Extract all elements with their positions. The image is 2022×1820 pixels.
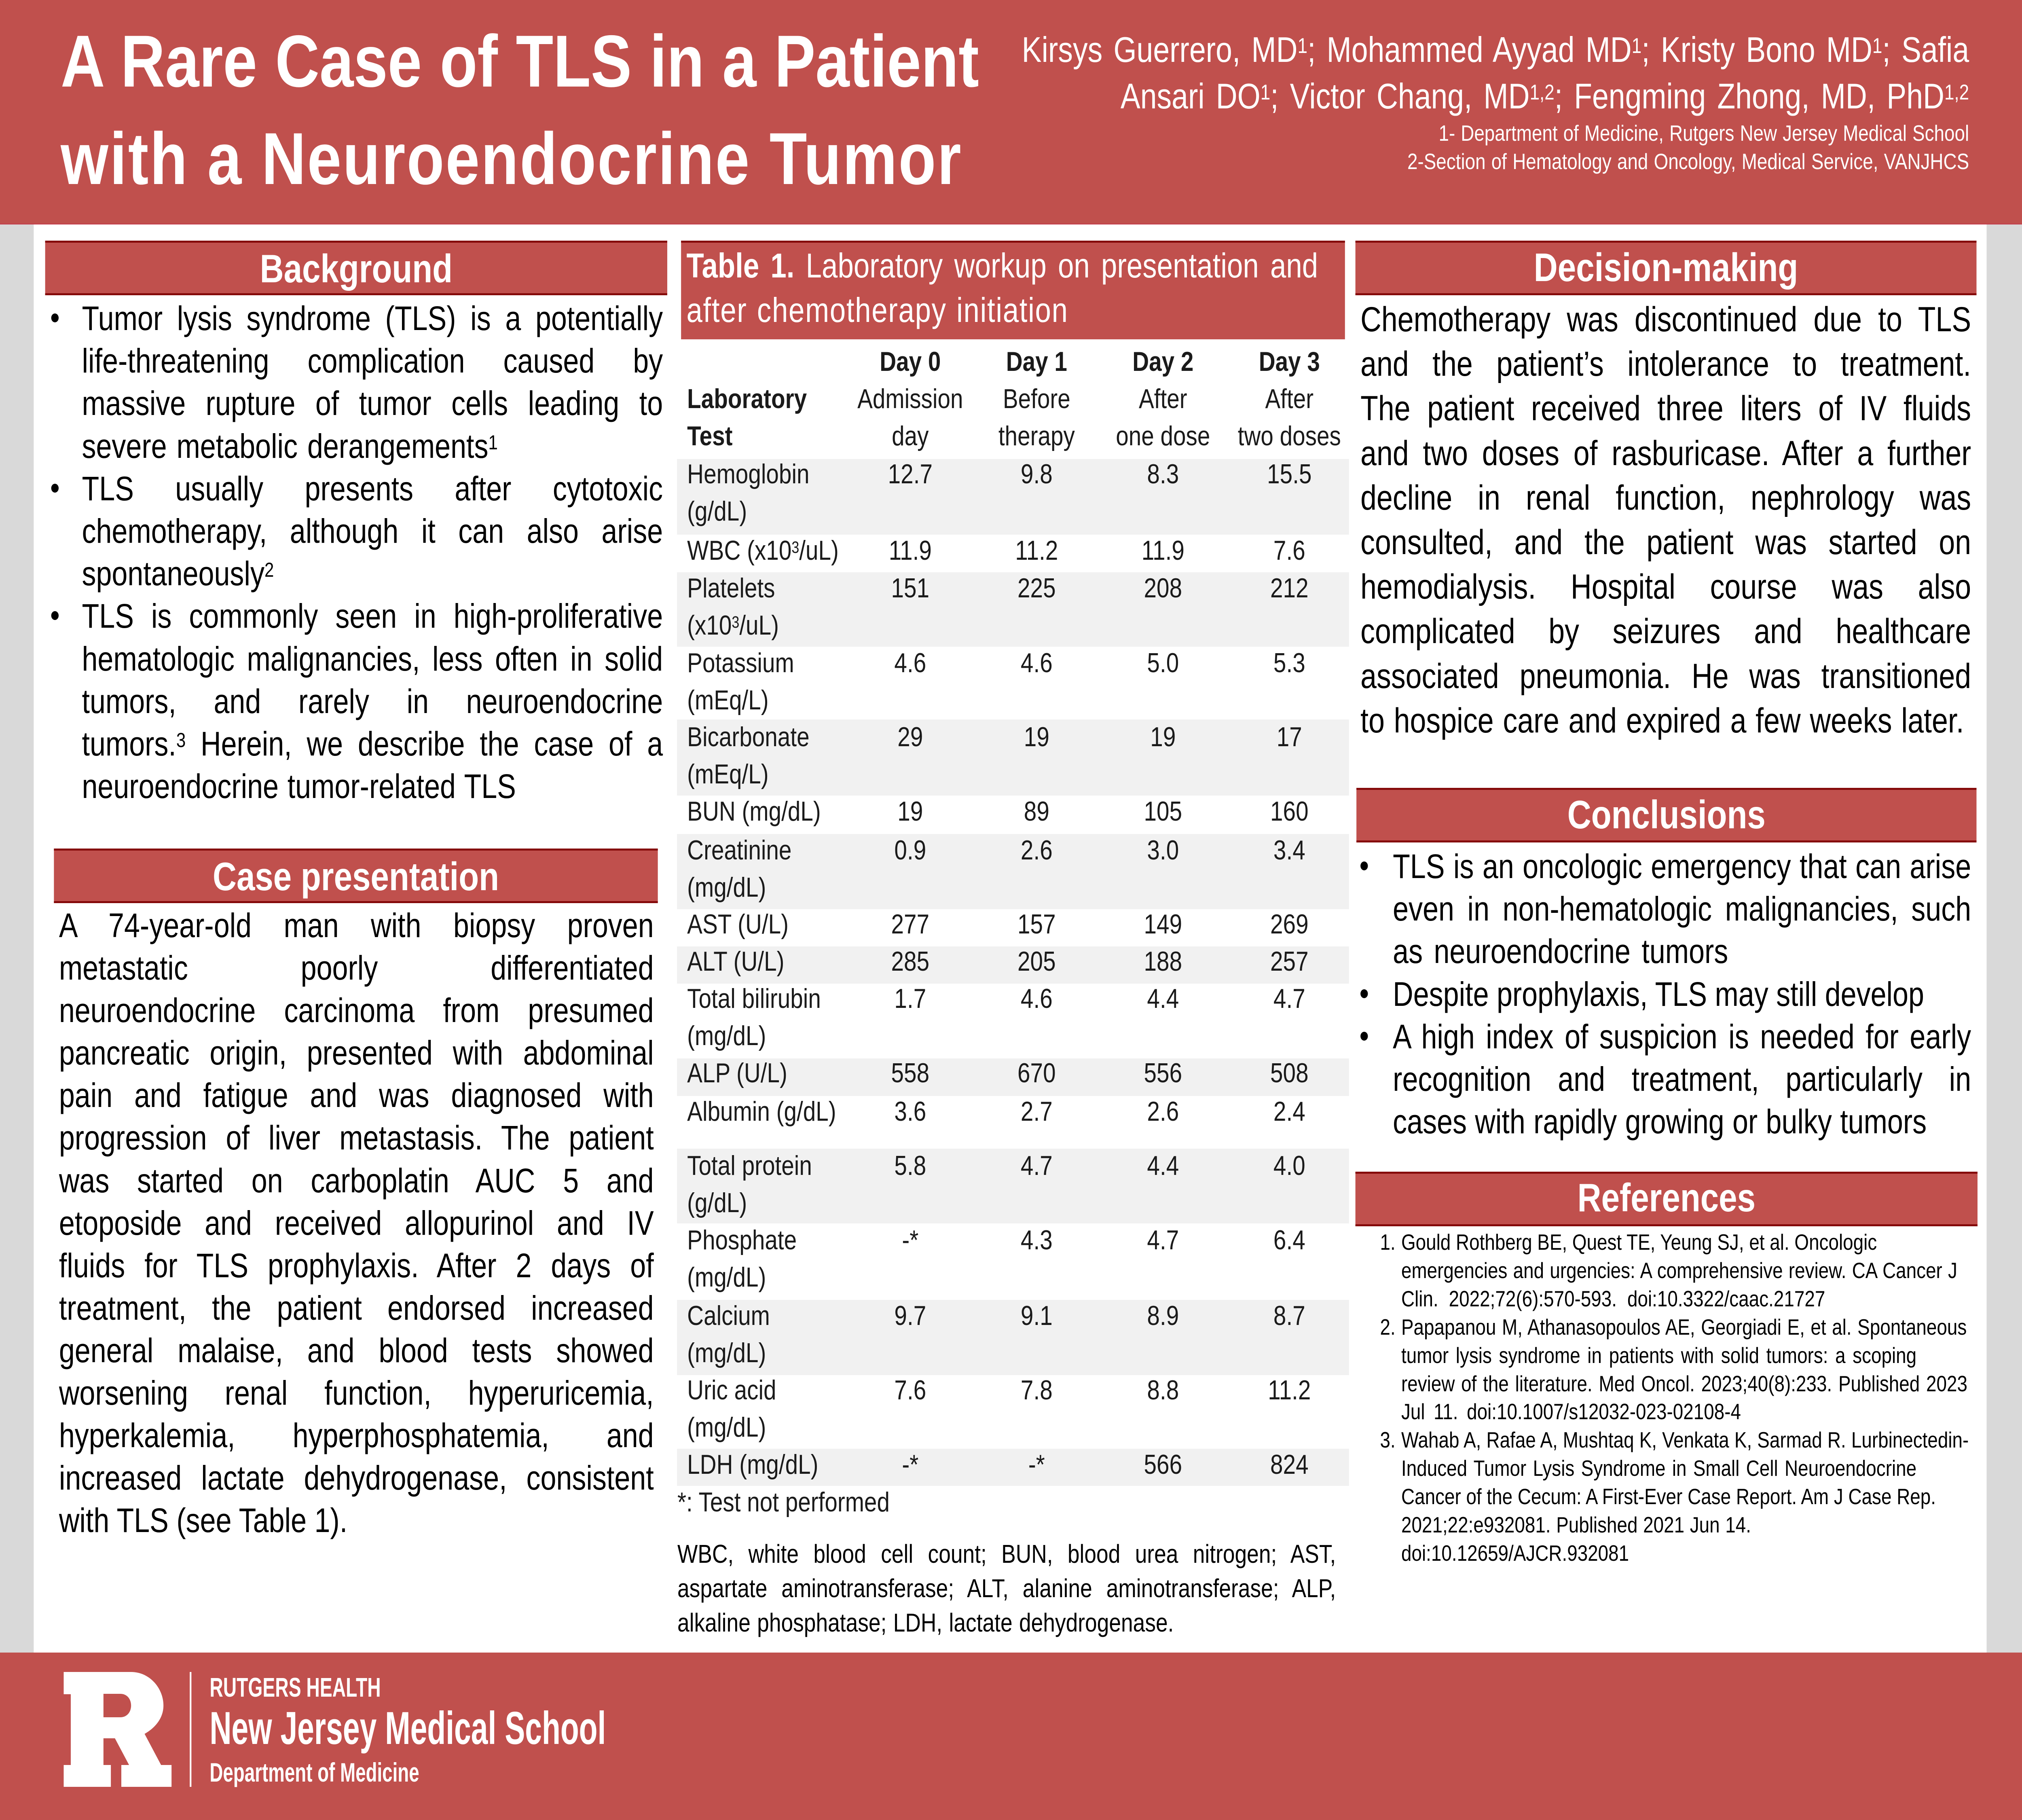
row: WBC: 11.9: [1142, 535, 1184, 566]
reference 2: tumor lysis syndrome in patients with solid tumors: a scoping: [1401, 1343, 1916, 1368]
row: potassium: 4.6: [894, 648, 926, 678]
row: phosphate: 4.7: [1147, 1225, 1179, 1255]
title: [61, 13, 979, 207]
table header row: therapy: [998, 421, 1075, 451]
row: ALP: 558: [891, 1058, 929, 1088]
row: uric acid: 7.6: [894, 1375, 926, 1405]
heading: Background: [45, 241, 667, 295]
row: BUN: 160: [1270, 796, 1309, 827]
row: potassium: [677, 647, 1349, 720]
panel: case presentation text: increased lactate dehydrogenase, consistent: [59, 1459, 654, 1497]
row: bicarbonate: Bicarbonate: [687, 722, 810, 752]
panel: decision-making text: to hospice care and expired a few weeks later.: [1360, 701, 1964, 740]
heading: Conclusions: Conclusions: [1567, 792, 1766, 837]
table abbreviations note: aspartate aminotransferase; ALT, alanine aminotransferase; ALP,: [677, 1574, 1336, 1603]
panel: case presentation text: worsening renal function, hyperuricemia,: [59, 1374, 654, 1412]
table footnote: test not performed: *: Test not performed: [677, 1487, 890, 1517]
table header row: Day 0: [880, 346, 941, 377]
bullet: TLS definition: massive rupture of tumor cells leading to: [82, 384, 663, 422]
row: uric acid: (mg/dL): [687, 1412, 766, 1443]
row: ALT: 257: [1270, 946, 1309, 977]
bullet: TLS after chemotherapy: chemotherapy, although it can also arise: [82, 512, 663, 550]
row: uric acid: 11.2: [1268, 1375, 1311, 1405]
row: bicarbonate: (mEq/L): [687, 759, 769, 789]
row: uric acid: [677, 1375, 1349, 1449]
row: total bilirubin: 1.7: [894, 983, 926, 1014]
row: ALP: 556: [1144, 1058, 1182, 1088]
reference 2: review of the literature. Med Oncol. 2023;40(8):233. Published 2023: [1401, 1371, 1967, 1396]
row: LDH: 824: [1270, 1449, 1309, 1480]
left side bar: [0, 224, 34, 1653]
row: total protein: (g/dL): [687, 1187, 747, 1218]
reference 3: Induced Tumor Lysis Syndrome in Small Cell Neuroendocrine: [1401, 1456, 1916, 1481]
row: creatinine: 2.6: [1021, 835, 1053, 866]
row: platelets: (x103/uL): [687, 610, 779, 641]
heading: References: [1356, 1172, 1978, 1226]
row: BUN: 105: [1144, 796, 1182, 827]
bullet: TLS in malignancies: hematologic malignancies, less often in solid: [82, 640, 663, 678]
row: WBC: 11.2: [1015, 535, 1058, 566]
row: bicarbonate: 29: [897, 722, 923, 752]
panel: case presentation text: with TLS (see Table 1).: [59, 1501, 347, 1539]
row: WBC: WBC (x103/uL): [687, 535, 839, 566]
panel: case presentation text: was started on carboplatin AUC 5 and: [59, 1162, 654, 1200]
reference 1: Gould Rothberg BE, Quest TE, Yeung SJ, et al. Oncologic: [1401, 1230, 1877, 1255]
bullet: index of suspicion: A high index of suspicion is needed for early: [1393, 1018, 1971, 1056]
row: total protein: 4.0: [1273, 1150, 1305, 1181]
panel: case presentation text: pain and fatigue and was diagnosed with: [59, 1076, 654, 1114]
row: LDH: LDH (mg/dL): [687, 1449, 819, 1480]
panel: case presentation text: etoposide and received allopurinol and IV: [59, 1204, 654, 1242]
reference 2: Jul 11. doi:10.1007/s12032-023-02108-4: [1401, 1399, 1741, 1424]
text: 2.: [1380, 1314, 1396, 1340]
table abbreviations note: WBC, white blood cell count; BUN, blood urea nitrogen; AST,: [677, 1539, 1336, 1568]
panel: background text: [82, 297, 663, 808]
row: LDH: -*: [1028, 1449, 1045, 1480]
row: ALP: 508: [1270, 1058, 1309, 1088]
panel: decision-making text: and two doses of rasburicase. After a further: [1360, 434, 1971, 473]
bullet: TLS after chemotherapy: spontaneously2: [82, 554, 274, 593]
panel: case presentation text: A 74-year-old man with biopsy proven: [59, 906, 654, 944]
row: AST: [677, 909, 1349, 946]
panel: case presentation text: [59, 904, 654, 1542]
row: calcium: 8.7: [1273, 1300, 1305, 1331]
row: platelets: Platelets: [687, 573, 775, 603]
row: phosphate: 6.4: [1273, 1225, 1305, 1255]
row: albumin: Albumin (g/dL): [687, 1096, 836, 1127]
row: platelets: 151: [891, 573, 929, 603]
row: BUN: BUN (mg/dL): [687, 796, 821, 827]
panel: case presentation text: pancreatic origin, presented with abdominal: [59, 1034, 654, 1072]
row: potassium: 4.6: [1021, 648, 1053, 678]
bullet: prophylaxis: Despite prophylaxis, TLS may still develop: [1393, 975, 1924, 1013]
authors: Ansari DO1; Victor Chang, MD1,2; Fengming Zhong, MD, PhD1,2: [1121, 76, 1969, 116]
panel: decision-making text: hemodialysis. Hospital course was also: [1360, 567, 1971, 606]
table: laboratory workup: [677, 344, 1349, 1486]
table header row: Before: [1003, 383, 1070, 414]
row: BUN: [677, 796, 1349, 834]
row: total protein: [677, 1149, 1349, 1223]
bullet: TLS definition: Tumor lysis syndrome (TLS) is a potentially: [82, 299, 663, 337]
logo divider: [190, 1672, 191, 1787]
heading: Table 1 caption: [681, 241, 1345, 339]
row: potassium: 5.0: [1147, 648, 1179, 678]
bullet: oncologic emergency: even in non-hematologic malignancies, such: [1393, 890, 1971, 928]
row: potassium: 5.3: [1273, 648, 1305, 678]
row: total protein: 4.7: [1021, 1150, 1053, 1181]
reference 3: Wahab A, Rafae A, Mushtaq K, Venkata K, Sarmad R. Lurbinectedin-: [1401, 1427, 1969, 1452]
row: ALT: 285: [891, 946, 929, 977]
row: BUN: 19: [897, 796, 923, 827]
footer band: [0, 1653, 2022, 1820]
logo text: Rutgers Health: RUTGERS HEALTH: [209, 1672, 381, 1703]
row: WBC: [677, 535, 1349, 572]
row: albumin: 2.7: [1021, 1096, 1053, 1127]
row: ALT: [677, 946, 1349, 984]
heading: References: References: [1578, 1175, 1756, 1220]
row: AST: 269: [1270, 909, 1309, 940]
row: total bilirubin: Total bilirubin: [687, 983, 821, 1014]
row: hemoglobin: [677, 459, 1349, 535]
row: albumin: 2.4: [1273, 1096, 1305, 1127]
row: ALT: ALT (U/L): [687, 946, 785, 977]
panel: references list: [1401, 1228, 1969, 1568]
row: hemoglobin: Hemoglobin: [687, 459, 810, 489]
row: total protein: 4.4: [1147, 1150, 1179, 1181]
row: phosphate: [677, 1223, 1349, 1300]
heading: Background: Background: [260, 246, 453, 291]
row: BUN: 89: [1024, 796, 1049, 827]
table header row: Laboratory: [687, 383, 807, 414]
panel: case presentation text: hyperkalemia, hyperphosphatemia, and: [59, 1416, 654, 1454]
heading: Table 1 caption: Table 1. Laboratory workup on presentation and: [686, 247, 1318, 285]
row: LDH: -*: [902, 1449, 918, 1480]
bullet: TLS in malignancies: tumors.3 Herein, we describe the case of a: [82, 725, 663, 763]
affiliations: 1- Department of Medicine, Rutgers New Jersey Medical School: [1438, 121, 1969, 146]
panel: decision-making text: associated pneumonia. He was transitioned: [1360, 657, 1971, 696]
bullet: TLS after chemotherapy: TLS usually presents after cytotoxic: [82, 470, 663, 508]
row: albumin: 3.6: [894, 1096, 926, 1127]
row: ALT: 205: [1017, 946, 1056, 977]
row: calcium: 9.7: [894, 1300, 926, 1331]
table header row: Day 3: [1259, 346, 1320, 377]
reference 3: [1401, 1426, 1969, 1568]
row: uric acid: 8.8: [1147, 1375, 1179, 1405]
bullet: TLS definition: life-threatening complication caused by: [82, 342, 663, 380]
panel: case presentation text: fluids for TLS prophylaxis. After 2 days of: [59, 1246, 654, 1285]
panel: decision-making text: The patient received three liters of IV fluids: [1360, 389, 1971, 428]
row: calcium: Calcium: [687, 1300, 770, 1331]
bullet: index of suspicion: [1393, 1016, 1971, 1143]
reference 1: Clin. 2022;72(6):570-593. doi:10.3322/caac.21727: [1401, 1286, 1825, 1311]
row: calcium: 9.1: [1021, 1300, 1053, 1331]
row: total bilirubin: 4.7: [1273, 983, 1305, 1014]
reference 2: [1401, 1313, 1969, 1426]
reference 1: emergencies and urgencies: A comprehensive review. CA Cancer J: [1401, 1258, 1957, 1283]
row: calcium: [677, 1300, 1349, 1375]
row: creatinine: 0.9: [894, 835, 926, 866]
bullet: TLS in malignancies: tumors, and rarely in neuroendocrine: [82, 682, 663, 720]
table abbreviations note: [677, 1537, 1336, 1640]
reference 3: 2021;22:e932081. Published 2021 Jun 14.: [1401, 1512, 1751, 1537]
row: AST: 277: [891, 909, 929, 940]
row: albumin: [677, 1096, 1349, 1149]
right side bar: [1986, 224, 2022, 1653]
heading: Decision-making: Decision-making: [1534, 245, 1798, 290]
row: total bilirubin: 4.6: [1021, 983, 1053, 1014]
affiliations: [1407, 119, 1969, 176]
row: potassium: (mEq/L): [687, 685, 769, 715]
bullet: TLS in malignancies: TLS is commonly seen in high-proliferative: [82, 597, 663, 635]
row: bicarbonate: 17: [1277, 722, 1302, 752]
row: hemoglobin: 8.3: [1147, 459, 1179, 489]
row: potassium: Potassium: [687, 648, 794, 678]
affiliations: 2-Section of Hematology and Oncology, Medical Service, VANJHCS: [1407, 149, 1969, 174]
heading: Table 1 caption: after chemotherapy initiation: [686, 291, 1068, 330]
panel: decision-making text: [1360, 297, 1971, 743]
panel: decision-making text: decline in renal function, nephrology was: [1360, 478, 1971, 517]
row: platelets: 212: [1270, 573, 1309, 603]
bullet: TLS in malignancies: neuroendocrine tumor-related TLS: [82, 767, 516, 805]
reference 3: doi:10.12659/AJCR.932081: [1401, 1541, 1629, 1566]
panel: case presentation text: treatment, the patient endorsed increased: [59, 1289, 654, 1327]
heading: Decision-making: [1356, 241, 1976, 295]
row: total protein: Total protein: [687, 1150, 812, 1181]
panel: case presentation text: general malaise, and blood tests showed: [59, 1331, 654, 1369]
bullet: oncologic emergency: as neuroendocrine tumors: [1393, 932, 1728, 970]
row: creatinine: [677, 834, 1349, 909]
authors: [1022, 26, 1969, 119]
table header row: After: [1139, 383, 1187, 414]
icon: block R: [63, 1672, 171, 1787]
table header row: two doses: [1238, 421, 1341, 451]
row: calcium: (mg/dL): [687, 1337, 766, 1368]
table abbreviations note: alkaline phosphatase; LDH, lactate dehydrogenase.: [677, 1608, 1174, 1637]
authors: Kirsys Guerrero, MD1; Mohammed Ayyad MD1; Kristy Bono MD1; Safia: [1022, 30, 1969, 70]
bullet: index of suspicion: recognition and treatment, particularly in: [1393, 1060, 1971, 1098]
row: LDH: 566: [1144, 1449, 1182, 1480]
row: creatinine: (mg/dL): [687, 872, 766, 903]
row: bicarbonate: 19: [1150, 722, 1176, 752]
row: phosphate: (mg/dL): [687, 1262, 766, 1293]
title: with a Neuroendocrine Tumor: [61, 117, 962, 200]
row: bicarbonate: [677, 720, 1349, 796]
row: bicarbonate: 19: [1024, 722, 1049, 752]
table header row: day: [892, 421, 929, 451]
row: total protein: 5.8: [894, 1150, 926, 1181]
row: platelets: 208: [1144, 573, 1182, 603]
logo text: Department of Medicine: Department of Medicine: [209, 1757, 419, 1787]
row: hemoglobin: (g/dL): [687, 496, 747, 527]
row: albumin: 2.6: [1147, 1096, 1179, 1127]
row: uric acid: 7.8: [1021, 1375, 1053, 1405]
row: ALP: 670: [1017, 1058, 1056, 1088]
logo: Rutgers Health New Jersey Medical School: [61, 1669, 610, 1790]
row: LDH: [677, 1449, 1349, 1486]
row: platelets: 225: [1017, 573, 1056, 603]
panel: decision-making text: and the patient’s intolerance to treatment.: [1360, 345, 1971, 383]
text: 3.: [1380, 1427, 1396, 1452]
table header row: Day 2: [1132, 346, 1193, 377]
reference 3: Cancer of the Cecum: A First-Ever Case Report. Am J Case Rep.: [1401, 1484, 1936, 1509]
panel: conclusions text: [1393, 845, 1971, 1143]
panel: decision-making text: Chemotherapy was discontinued due to TLS: [1360, 300, 1971, 339]
row: AST: AST (U/L): [687, 909, 789, 940]
row: phosphate: Phosphate: [687, 1225, 797, 1255]
table header row: Test: [687, 421, 732, 451]
table header row: After: [1265, 383, 1313, 414]
table header row: one dose: [1116, 421, 1210, 451]
row: calcium: 8.9: [1147, 1300, 1179, 1331]
table header row: Day 1: [1006, 346, 1067, 377]
text: 1.: [1380, 1230, 1396, 1255]
row: hemoglobin: 9.8: [1021, 459, 1053, 489]
row: total bilirubin: [677, 984, 1349, 1058]
reference 1: [1401, 1228, 1969, 1313]
row: ALP: ALP (U/L): [687, 1058, 787, 1088]
table header row: [677, 344, 1349, 459]
row: creatinine: 3.4: [1273, 835, 1305, 866]
row: platelets: [677, 572, 1349, 647]
row: creatinine: Creatinine: [687, 835, 791, 866]
header band: [0, 0, 2022, 224]
row: phosphate: -*: [902, 1225, 918, 1255]
bullet: index of suspicion: cases with rapidly growing or bulky tumors: [1393, 1103, 1927, 1141]
row: creatinine: 3.0: [1147, 835, 1179, 866]
panel: case presentation text: neuroendocrine carcinoma from presumed: [59, 991, 654, 1029]
row: ALT: 188: [1144, 946, 1182, 977]
bullet: oncologic emergency: TLS is an oncologic emergency that can arise: [1393, 847, 1971, 885]
title: A Rare Case of TLS in a Patient: [61, 20, 979, 102]
row: uric acid: Uric acid: [687, 1375, 776, 1405]
heading: Conclusions: [1356, 788, 1976, 842]
panel: case presentation text: progression of liver metastasis. The patient: [59, 1119, 654, 1157]
row: hemoglobin: 12.7: [888, 459, 933, 489]
reference 2: Papapanou M, Athanasopoulos AE, Georgiadi E, et al. Spontaneous: [1401, 1314, 1967, 1340]
bullet: TLS definition: severe metabolic derangements1: [82, 427, 498, 465]
heading: Case presentation: Case presentation: [213, 854, 499, 899]
row: hemoglobin: 15.5: [1267, 459, 1311, 489]
bullet: TLS after chemotherapy: [82, 468, 663, 595]
bullet: TLS in malignancies: [82, 595, 663, 808]
row: total bilirubin: (mg/dL): [687, 1020, 766, 1051]
panel: decision-making text: consulted, and the patient was started on: [1360, 523, 1971, 562]
bullet: oncologic emergency: [1393, 845, 1971, 973]
heading: Case presentation: [54, 849, 658, 903]
row: WBC: 7.6: [1273, 535, 1305, 566]
panel: decision-making text: complicated by seizures and healthcare: [1360, 612, 1971, 651]
bullet: TLS definition: [82, 297, 663, 468]
row: AST: 157: [1017, 909, 1056, 940]
panel: case presentation text: metastatic poorly differentiated: [59, 949, 654, 987]
row: AST: 149: [1144, 909, 1182, 940]
row: phosphate: 4.3: [1021, 1225, 1053, 1255]
table header row: Admission: [857, 383, 963, 414]
row: ALP: [677, 1058, 1349, 1096]
row: WBC: 11.9: [889, 535, 932, 566]
row: total bilirubin: 4.4: [1147, 983, 1179, 1014]
